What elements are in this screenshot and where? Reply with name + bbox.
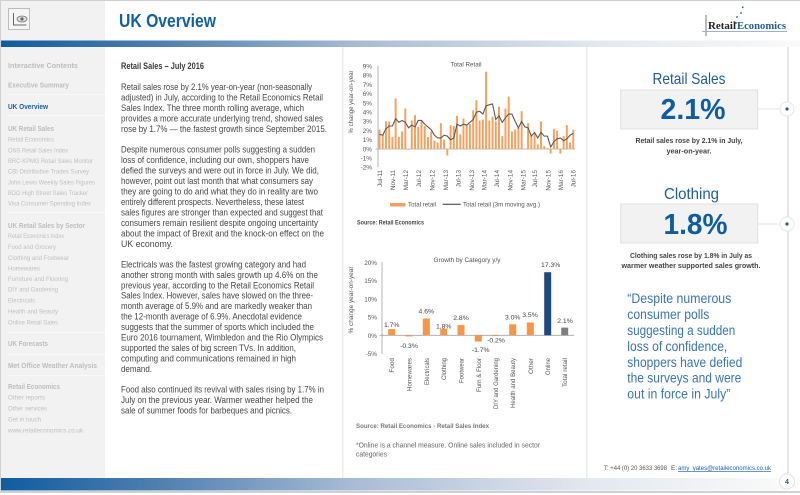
value labels: -0.3%: [400, 343, 418, 350]
paragraph: electricals: the 12-month average of 6.9%. Anecdotal evidence: [121, 312, 302, 322]
x axis month labels: Jul-13: [456, 170, 462, 187]
y axis ticks: 8%: [363, 73, 372, 80]
connector and node: [757, 217, 794, 231]
navigation group: UK Retail Sales: John Lewis Weekly Sales Figures: [8, 180, 96, 186]
navigation group: UK Retail Sales by Sector: Health and Beauty: [8, 308, 59, 316]
value labels: 4.6%: [419, 308, 434, 316]
navigation heading: UK Forecasts: UK Forecasts: [8, 339, 48, 348]
paragraph: electricals: Sales Index. However, sales have slowed on the three-: [121, 290, 313, 300]
x axis month labels: Jul-11: [377, 170, 384, 187]
category labels: Furn & Floor: [476, 357, 483, 392]
navigation group: Retail Economics: Get in touch: [8, 416, 41, 424]
navigation group: UK Retail Sales: ONS Retail Sales Index: [8, 148, 69, 154]
pull quote: out in force in July”: [627, 386, 730, 402]
paragraph: retail sales: Sales Index. The three month rolling average, which: [121, 103, 304, 113]
y axis ticks: 10%: [364, 296, 377, 303]
category labels: [389, 357, 569, 409]
logo: Retail Economics: [702, 6, 787, 36]
navigation group: UK Retail Sales: UK Retail Sales: [8, 124, 54, 133]
axes: [376, 66, 575, 167]
contact details: E:: [671, 465, 677, 472]
category labels: DIY and Gardening: [493, 358, 500, 409]
bars: categories: [388, 272, 568, 342]
value labels: -0.2%: [487, 338, 505, 344]
y axis ticks: 1%: [363, 137, 372, 144]
y axis ticks: 0%: [368, 333, 377, 340]
navigation heading: Executive Summary: Executive Summary: [8, 80, 70, 90]
page number badge: 4: [785, 479, 789, 486]
chart: Total Retail bars and moving average: [348, 62, 578, 226]
category labels: Online: [545, 358, 552, 375]
navigation heading: UK Overview active: UK Overview: [8, 102, 48, 111]
x axis month labels: Jul-12: [416, 170, 423, 187]
y axis label: % change year-on-year: [348, 266, 355, 334]
navigation group: UK Retail Sales: BRC-KPMG Retail Sales Monitor: [8, 158, 94, 165]
navigation heading: Interactive Contents: Interactive Contents: [8, 61, 78, 70]
panel: Clothing KPI: [621, 186, 794, 270]
navigation group: Retail Economics: www.retaileconomics.co.uk: [7, 428, 84, 434]
navigation group: UK Retail Sales by Sector: DIY and Gardening: [8, 286, 58, 294]
x axis month labels: Mar-15: [520, 170, 528, 190]
value labels: 2.1%: [557, 318, 573, 325]
legend: [390, 202, 540, 208]
navigation group: UK Retail Sales: BDO High Street Sales Tracker: [8, 190, 89, 197]
legend: Total retail: [408, 202, 436, 208]
source note: Source: Retail Economics - Retail Sales Index: [356, 423, 489, 430]
source note: Source: Retail Economics: [357, 220, 424, 226]
y axis ticks: 4%: [363, 110, 372, 116]
paragraph: consumer polls: about the impact of Brexit and the knock-on effect on the: [121, 228, 324, 238]
category labels: Health and Beauty: [510, 357, 517, 408]
y axis ticks: 9%: [363, 64, 372, 70]
chart: Growth by Category: [348, 257, 574, 458]
KPI caption: [621, 251, 761, 270]
category labels: Other: [528, 357, 535, 374]
value labels: 2.8%: [453, 315, 469, 322]
navigation group: Retail Economics: Other reports: [8, 394, 46, 402]
KPI caption: Clothing sales rose by 1.8% in July as: [630, 251, 752, 260]
category labels: Homewares: [406, 358, 414, 391]
paragraph: consumer polls: Despite numerous consumer polls suggesting a sudden: [121, 144, 315, 154]
navigation group: UK Retail Sales by Sector: Retail Economics Index: [8, 233, 65, 240]
line: 3 month moving average: [380, 104, 573, 147]
paragraph: electricals: suggests that the summer of sports which included the: [121, 322, 314, 332]
y axis ticks: -2%: [361, 165, 372, 172]
navigation group: UK Retail Sales by Sector: Online Retail Sales: [8, 320, 59, 326]
category labels: Food: [389, 358, 396, 373]
value labels: 1.7%: [384, 322, 399, 329]
paragraph: food: [121, 384, 324, 416]
navigation group: UK Retail Sales: Retail Economics: [8, 136, 55, 144]
paragraph: consumer polls: loss of confidence, including our own, shoppers have: [121, 155, 309, 165]
chart title: Growth by Category y/y: [434, 257, 501, 264]
y axis ticks: 0%: [363, 146, 372, 153]
paragraph: consumer polls: UK economy.: [121, 239, 173, 249]
paragraph: electricals: another strong month with sales growth up 4.6% on the: [121, 270, 318, 280]
legend: Total retail (3m moving avg.): [463, 202, 540, 208]
KPI caption: warmer weather supported sales growth.: [621, 261, 761, 270]
pull quote: the surveys and were: [627, 370, 741, 386]
y axis ticks: 20%: [364, 260, 377, 267]
article heading: Retail Sales – July 2016: [121, 61, 204, 71]
title: UK Overview: [119, 11, 217, 31]
axes: [380, 262, 574, 354]
y axis ticks: 5%: [363, 100, 372, 107]
paragraph: retail sales: adjusted) in July, according to the Retail Economics Retail: [121, 92, 323, 102]
pull quote: “Despite numerous: [627, 291, 732, 306]
navigation group: UK Retail Sales: [8, 124, 96, 208]
footnote: categories: [356, 452, 387, 458]
paragraph: consumer polls: [121, 144, 324, 249]
category labels: Total retail: [562, 358, 569, 387]
navigation group: UK Retail Sales by Sector: Clothing and Footwear: [8, 255, 70, 262]
navigation group: UK Retail Sales: Visa Consumer Spending Index: [8, 200, 92, 208]
paragraph: consumer polls: entirely different prospects. Nevertheless, these latest: [121, 197, 304, 207]
y axis ticks: -5%: [366, 351, 377, 358]
x axis month labels: [377, 170, 578, 191]
x axis month labels: Nov-15: [546, 170, 552, 191]
y axis ticks: 2%: [363, 128, 372, 135]
contact details: T: +44 (0) 20 3633 3698: [604, 465, 667, 472]
paragraph: electricals: Electricals was the fastest growing category and had: [121, 260, 306, 270]
category labels: Clothing: [441, 358, 448, 380]
navigation group: UK Retail Sales by Sector: Furniture and Flooring: [8, 276, 68, 283]
paragraph: consumer polls: sales figures are stronger than expected and suggest that: [121, 208, 323, 218]
KPI heading: Clothing: [664, 186, 719, 203]
navigation group: UK Retail Sales by Sector: [8, 221, 85, 326]
paragraph: electricals: supported the sales of big screen TVs. In addition,: [121, 343, 296, 353]
value labels: 17.3%: [541, 262, 560, 269]
x axis month labels: Nov-13: [469, 170, 476, 191]
x axis month labels: Mar-14: [482, 170, 488, 190]
navigation group: Retail Economics: Other services: [8, 406, 48, 412]
paragraph: food: Food also continued its revival with sales rising by 1.7% in: [121, 384, 324, 394]
x axis month labels: Jul-15: [532, 170, 539, 187]
y axis ticks: 3%: [363, 119, 372, 126]
navigation group: UK Retail Sales: CBI Distributive Trades Survey: [8, 168, 90, 176]
KPI box: [621, 90, 758, 129]
KPI caption: Retail sales rose by 2.1% in July,: [636, 136, 742, 145]
paragraph: food: July on the previous year. Warmer weather helped the: [121, 395, 313, 405]
pull quote: [627, 291, 742, 402]
paragraph: retail sales: Retail sales rose by 2.1% year-on-year (non-seasonally: [121, 82, 312, 92]
y axis ticks: 7%: [363, 82, 372, 89]
navigation group: UK Retail Sales by Sector: Electricals: [8, 298, 36, 304]
pull quote: shoppers have defied: [627, 355, 742, 370]
footer band: [1, 478, 787, 490]
value labels: 3.0%: [505, 314, 520, 322]
paragraph: food: sale of summer foods for barbeques and picnics.: [121, 406, 292, 416]
y axis ticks: -1%: [361, 156, 372, 162]
contact details: [604, 465, 772, 472]
value labels: 1.8%: [436, 324, 451, 330]
category labels: Footwear: [458, 357, 466, 383]
footnote: *Online is a channel measure. Online sales included in sector: [356, 442, 541, 450]
navigation group: UK Retail Sales by Sector: UK Retail Sales by Sector: [8, 221, 85, 230]
x axis month labels: Nov-12: [430, 170, 436, 191]
paragraph: consumer polls: consumers remain resilient despite ongoing uncertainty: [121, 218, 318, 228]
y axis ticks: [364, 260, 377, 358]
pull quote: consumer polls: [627, 307, 710, 322]
paragraph: consumer polls: defied the surveys and were out in force in July. We did,: [121, 166, 319, 176]
footnote: [356, 442, 541, 458]
paragraph: electricals: computing and communications remained in high: [121, 354, 296, 364]
paragraph: retail sales: [121, 82, 327, 134]
paragraph: electricals: demand.: [121, 364, 152, 374]
KPI box: [621, 204, 758, 243]
paragraph: electricals: previous year, according to the Retail Economics Retail: [121, 280, 314, 290]
navigation group: Retail Economics: Retail Economics: [8, 382, 60, 391]
category labels: Electricals: [424, 358, 431, 385]
navigation heading: Met Office Weather Analysis: Met Office Weather Analysis: [8, 361, 97, 370]
pull quote: loss of confidence,: [627, 339, 727, 354]
paragraph: electricals: [121, 260, 323, 374]
logo: Retail Economics: Economics: [737, 20, 787, 32]
KPI caption: year-on-year.: [666, 146, 712, 156]
logo: Retail Economics: Retail: [708, 20, 736, 32]
value labels: [384, 262, 573, 354]
x axis month labels: Jul-16: [570, 170, 578, 187]
paragraph: consumer polls: they are going to do and what they do in reality are two: [121, 186, 318, 196]
value labels: -1.7%: [472, 347, 490, 354]
KPI value: 1.8%: [664, 209, 728, 241]
icon: chart with eye: [8, 8, 30, 30]
y axis ticks: 5%: [368, 314, 377, 322]
contact details: amy_yates@retaileconomics.co.uk: [678, 465, 772, 472]
connector and node: [757, 102, 794, 116]
x axis month labels: Mar-12: [403, 170, 410, 190]
value labels: 3.5%: [522, 312, 538, 319]
panel: Retail Sales KPI: [621, 71, 794, 156]
panel: sidebar navigation: [1, 1, 105, 478]
x axis month labels: Jul-14: [494, 170, 501, 187]
paragraph: consumer polls: however, point out last month that what consumers say: [121, 176, 313, 186]
paragraph: retail sales: rose by 1.7% — the fastest growth since September 2015.: [121, 124, 327, 134]
navigation group: Retail Economics: [7, 382, 84, 434]
paragraph: electricals: Euro 2016 tournament, Wimbledon and the Rio Olympics: [121, 332, 323, 342]
y axis ticks: [361, 64, 372, 172]
navigation group: UK Retail Sales by Sector: Homewares: [8, 266, 41, 272]
paragraph: retail sales: provides a more accurate underlying trend, showed sales: [121, 114, 323, 124]
KPI caption: [636, 136, 742, 156]
paragraph: electricals: month average of 5.9% and are markedly weaker than: [121, 301, 312, 311]
x axis month labels: Mar-13: [443, 170, 450, 190]
y axis ticks: 6%: [363, 91, 372, 98]
navigation group: UK Retail Sales by Sector: Food and Grocery: [8, 244, 57, 251]
bars: total retail: [379, 72, 574, 155]
page number badge: [780, 474, 794, 489]
x axis month labels: Nov-11: [390, 170, 397, 190]
KPI value: 2.1%: [660, 94, 726, 126]
y axis label: % change year-on-year: [348, 70, 355, 134]
header band: [1, 40, 800, 47]
panel: article text: [121, 61, 327, 416]
y axis ticks: 15%: [364, 278, 377, 285]
KPI heading: Retail Sales: [652, 71, 726, 88]
x axis month labels: Mar-16: [558, 170, 565, 190]
chart title: Total Retail: [450, 62, 482, 68]
pull quote: suggesting a sudden: [627, 323, 735, 338]
x axis month labels: Nov-14: [508, 170, 514, 191]
